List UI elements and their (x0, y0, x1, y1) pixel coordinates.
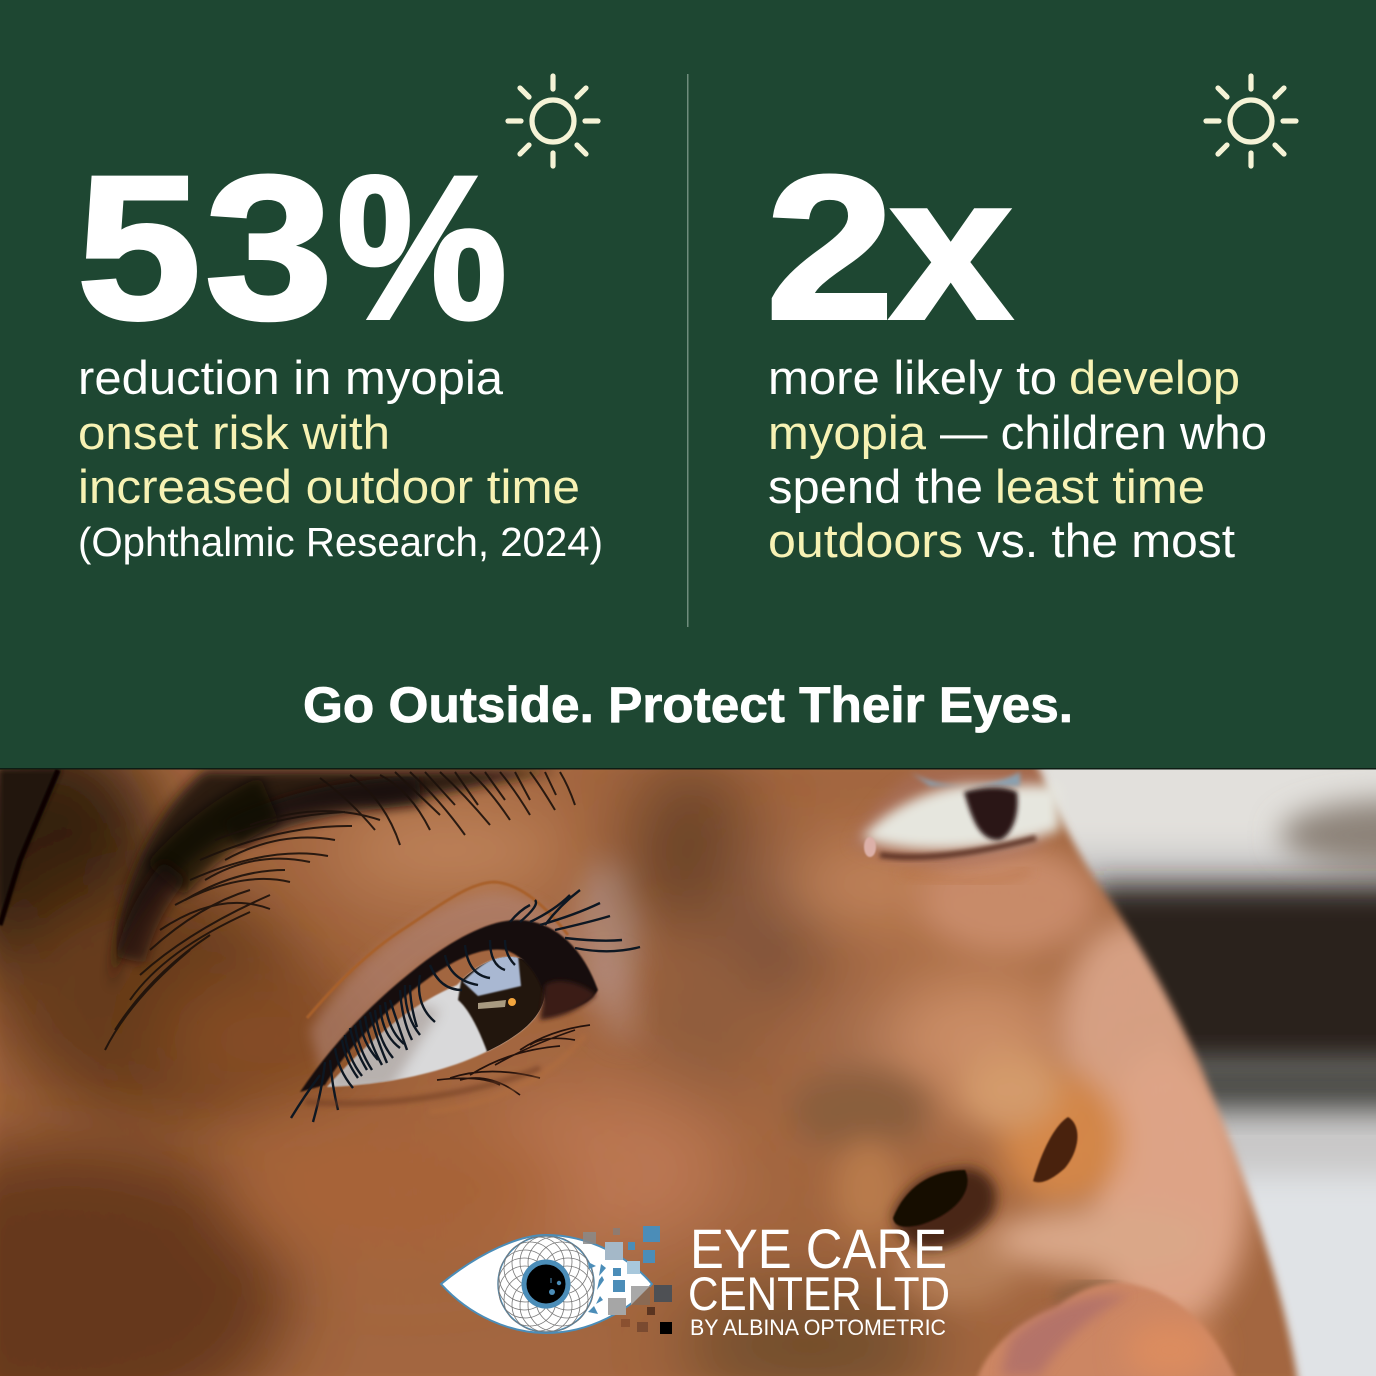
stat: 2x: 2 (766, 134, 894, 362)
text block: right description: outdoors (768, 514, 963, 567)
text block: right description: least time (995, 460, 1205, 513)
text block: right description: more likely to (768, 351, 1057, 404)
text block: right description (768, 351, 1267, 567)
logo: Eye Care Center Ltd (441, 1217, 950, 1340)
text block: left description: (Ophthalmic Research, 2024) (78, 519, 603, 565)
text block: left description: increased outdoor time (78, 460, 580, 513)
text block: right description: — children who (940, 406, 1267, 459)
main eye (291, 890, 640, 1122)
icon: sun right (1206, 76, 1296, 166)
stat: 53%: 3 (205, 134, 333, 362)
stat: 2x: x (890, 134, 1012, 362)
stat: 2x (766, 134, 1012, 362)
logo wordmark (688, 1217, 950, 1340)
icon: stylized eye (441, 1235, 652, 1333)
panel: green stats background (0, 0, 1376, 769)
photo: close-up of child's face (0, 730, 1376, 1376)
text block: left description: reduction in myopia (78, 351, 504, 404)
photo background (1032, 770, 1376, 1376)
hair and brow (0, 770, 575, 1050)
face (0, 730, 1320, 1376)
stat: 53%: % (337, 134, 507, 362)
text block: left description (78, 351, 603, 565)
icon: sun left (508, 76, 598, 166)
text block: right description: develop (1069, 351, 1240, 404)
text block: right description: vs. the most (977, 514, 1235, 567)
upper eyelid and crease (307, 882, 636, 1075)
pixel squares (583, 1226, 672, 1334)
tagline: Go Outside. Protect Their Eyes. (303, 677, 1073, 733)
logo wordmark: CENTER LTD (688, 1267, 950, 1320)
stat: 53%: 5 (77, 134, 201, 362)
text block: right description: spend the (768, 460, 983, 513)
logo wordmark: BY ALBINA OPTOMETRIC (690, 1315, 946, 1340)
logo wordmark: EYE CARE (690, 1217, 947, 1280)
stat: 53% (77, 134, 507, 362)
photo top edge (0, 768, 1376, 770)
text block: right description: myopia (768, 406, 927, 459)
text block: left description: onset risk with (78, 406, 390, 459)
lips (977, 1283, 1237, 1376)
nose and nostrils (893, 1117, 1115, 1300)
center divider (687, 74, 688, 627)
second eye (850, 768, 1060, 882)
skin grain (14, 784, 1249, 1308)
